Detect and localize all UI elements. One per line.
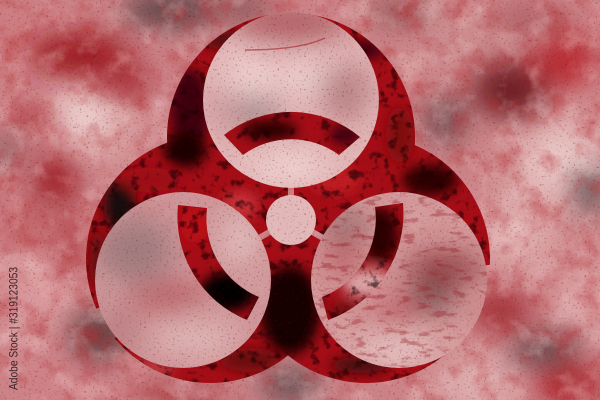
biohazard symbol	[86, 14, 490, 383]
panel: left circle interior	[90, 190, 280, 370]
panel: right circle interior	[305, 190, 495, 370]
panel: top circle interior	[203, 12, 379, 188]
stock watermark: Adobe Stock | #319123053	[6, 267, 20, 390]
central hub circle	[266, 195, 316, 245]
